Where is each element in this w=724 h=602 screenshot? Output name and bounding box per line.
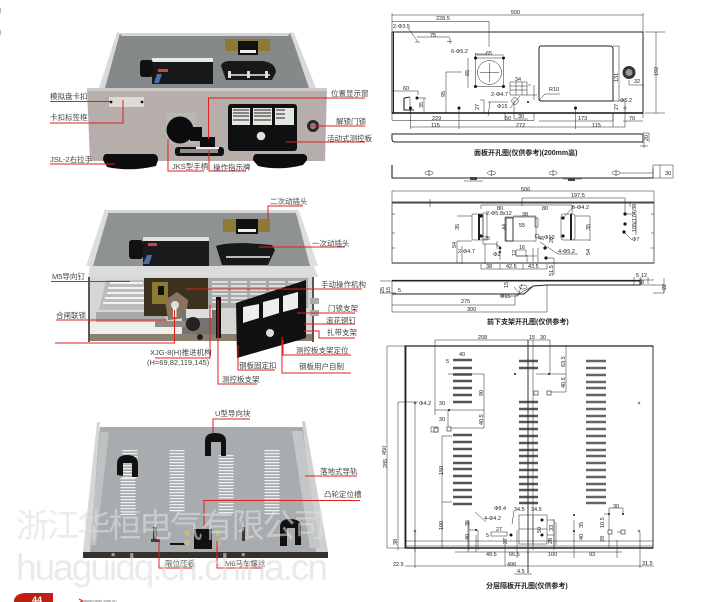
drawing: front lower bracket: 55 [519, 223, 525, 229]
drawing: partition plate: 27 [496, 527, 502, 533]
drawing: partition plate: 90 [479, 390, 485, 396]
drawing: partition plate: 50 [537, 527, 543, 533]
caption: partition plate: 分层隔板开孔图(仅供参考) [486, 581, 568, 590]
bracket [216, 297, 221, 338]
drawing: front lower bracket: 54 [586, 249, 592, 255]
drawing: front lower bracket: 35 [586, 224, 592, 230]
drawing: front lower bracket: 54 [452, 242, 458, 248]
bottom dims [392, 108, 643, 129]
callouts: open door view: 钢板固定扣 [239, 360, 276, 370]
drawing: front lower bracket: 80 [497, 206, 503, 212]
drawing: partition plate: 33 [549, 525, 555, 531]
drawing: partition plate: 31.5 [642, 561, 653, 567]
mechanism [144, 278, 216, 336]
drawing: front lower bracket: 2-Φ4.7 [458, 249, 475, 255]
callouts: open door view: 一次动插头 [312, 238, 350, 248]
drawing: panel cutout: R10 [549, 87, 559, 93]
drawing: panel cutout: 115 [592, 123, 601, 129]
drawing: front lower bracket: 4-Φ5.2 [558, 249, 575, 255]
drawing: front lower bracket: Φ15 [500, 294, 511, 300]
perforated plate [90, 278, 308, 336]
drawing: front lower bracket: 25 [380, 287, 386, 293]
drawing: front lower bracket: 38 [632, 204, 638, 210]
watermark: company name: 浙江华桓电气有限公司 [16, 507, 326, 544]
callouts: front view [50, 88, 372, 172]
callouts: front view: JKS型手柄 [172, 161, 209, 171]
cutout center [510, 82, 527, 95]
drawing: panel cutout: 70 [629, 116, 635, 122]
drawing: front lower bracket: 5 [636, 273, 639, 279]
drawing: front lower bracket: 105(174) [632, 210, 638, 232]
callouts: base plate: 限位压板 [165, 558, 195, 568]
drawing: front lower bracket: 275 [461, 299, 470, 305]
drawing: front lower bracket: 8 [641, 280, 644, 286]
drawing: panel cutout: 20 [644, 135, 650, 141]
drawing: front lower bracket: 80 [542, 206, 548, 212]
drawing: partition plate: 450 [382, 446, 388, 455]
drawing: panel cutout: 34 [515, 77, 521, 83]
drawing: panel cutout: 65 [465, 70, 471, 76]
drawing: front lower bracket: 35 [455, 224, 461, 230]
drawing: front lower bracket: Φ7 [632, 237, 639, 243]
side strip [392, 134, 643, 142]
center box [519, 515, 547, 544]
bottom rail [90, 334, 312, 341]
drawing: panel cutout: 27 [475, 104, 481, 110]
operating indicator [175, 147, 224, 156]
drawing: partition plate: 35 [579, 522, 585, 528]
panel: base plate photo [83, 421, 328, 558]
drawing: panel cutout: Φ5.2 [620, 98, 632, 104]
plate and rails [83, 421, 328, 558]
drawing: panel cutout: 32 [634, 79, 640, 85]
drawing: front lower bracket: 16 [519, 245, 525, 251]
control panel [228, 104, 297, 151]
drawing: front lower bracket: 20 [549, 237, 555, 243]
slot col 2 [519, 361, 538, 503]
front frame [88, 266, 318, 342]
callouts: base plate: 落地式导轨 [320, 466, 358, 476]
right holes [622, 212, 636, 240]
drawing: panel cutout: 2-Φ3.5 [393, 24, 410, 30]
callouts: open door view: 门锁支架 [328, 303, 358, 313]
drawing: panel cutout: 65 [486, 51, 492, 57]
callouts: open door view: M5导向钉 [52, 271, 85, 281]
callouts: open door view [51, 196, 366, 384]
black door [236, 280, 306, 358]
drawing: partition plate: 4-Φ4.2 [484, 516, 501, 522]
drawing: partition plate: 66.5 [509, 552, 520, 558]
drawing: panel cutout: 50 [505, 116, 511, 122]
callouts: open door view: 测控板支架定位 [296, 345, 349, 355]
breaker [140, 58, 213, 84]
drawing: front lower bracket: 300 [467, 307, 476, 313]
drawing: partition plate: 34.5 [514, 507, 525, 513]
drawing: partition plate: 35 [465, 520, 471, 526]
drawing: front lower bracket: 12 [641, 273, 647, 279]
drawing: panel cutout: 6-Φ5.2 [451, 49, 468, 55]
drawing: front lower bracket: 6-Φ4.2 [572, 205, 589, 211]
callouts: front view: 位置显示窗 [331, 88, 368, 98]
drawing: partition plate: 150 [439, 466, 445, 475]
round vents [622, 66, 636, 79]
callouts: front view: 模拟盘卡扣 [50, 91, 88, 101]
drawing: partition plate: 30 [613, 504, 619, 510]
center bracket [151, 527, 245, 549]
drawing: partition plate: 208 [478, 335, 487, 341]
caption: front lower bracket: 前下支架开孔图(仅供参考) [487, 317, 569, 326]
callouts: base plate: 凸轮定位槽 [324, 489, 362, 499]
drawing: panel cutout: Φ15 [497, 104, 508, 110]
unlock knob [307, 120, 319, 132]
side profile [392, 281, 640, 294]
drawing: partition plate: 27 [503, 538, 509, 544]
drawing: front lower bracket [380, 165, 673, 313]
callouts: base plate: U型导向块 [215, 408, 251, 418]
drawing: partition plate: 30 [439, 401, 445, 407]
drawing: panel cutout: 131 [614, 73, 620, 82]
drawing: front lower bracket: 15 [386, 287, 392, 293]
handles [103, 154, 307, 169]
drawing: partition plate: 5 [446, 359, 449, 365]
drawing: panel cutout: 2-Φ4.7 [491, 92, 508, 98]
drawing: partition plate: 40 [459, 352, 465, 358]
callouts: open door view: 钢板用户自制 [299, 361, 344, 371]
ventilation slots [128, 450, 272, 515]
drawing: partition plate: 93 [589, 552, 595, 558]
front panel [87, 88, 327, 161]
large window [539, 46, 613, 101]
drawing: partition plate: 28 [600, 536, 606, 542]
breaker [129, 237, 209, 270]
JKS handle [166, 113, 215, 149]
caption: panel cutout: 面板开孔图(仅供参考)(200mm高) [474, 148, 577, 157]
watermark: website: huaguidq.cn.china.cn [16, 547, 328, 588]
callouts: open door view: 合闸联锁 [56, 310, 86, 320]
drawing: front lower bracket: 38 [486, 264, 492, 270]
primary contact [221, 61, 276, 80]
drawing: panel cutout [392, 10, 665, 148]
drawing: front lower bracket: 42.5 [506, 264, 517, 270]
drawing: partition plate: 10.5 [600, 517, 606, 528]
drawing: front lower bracket: 44 [502, 224, 508, 230]
secondary plug [225, 39, 270, 55]
page number tab [14, 593, 53, 602]
U-shaped guides [117, 433, 301, 546]
callouts: open door view: 二次动插头 [270, 196, 308, 206]
callouts: base plate: M6马车螺丝 [225, 558, 266, 568]
callouts: open door view: XJG-8(H)推进机构 [150, 347, 212, 357]
drawing: partition plate: 22.5 [393, 562, 404, 568]
drawing: panel cutout: 500 [511, 10, 520, 16]
drawing: partition plate: 285 [383, 459, 389, 468]
drawing: partition plate: 5 [486, 533, 489, 539]
left holder [472, 213, 487, 240]
drawing: panel cutout: 27 [614, 104, 620, 110]
drawing: front lower bracket: 5 [398, 288, 401, 294]
drawing: front lower bracket: 12 [512, 250, 518, 256]
slot col 1 [453, 360, 472, 504]
drawing: partition plate: 63.5 [561, 356, 567, 367]
drawing: partition plate: 496 [507, 562, 516, 568]
drawing: panel cutout: 173 [578, 116, 587, 122]
drawing: front lower bracket: 46 [538, 236, 544, 242]
drawing: front lower bracket: 38 [522, 212, 528, 218]
panel: open door view photo [86, 209, 319, 358]
drawing: partition plate: 100 [548, 552, 557, 558]
drawing: partition plate: 100 [439, 521, 445, 530]
drawing: panel cutout: 30 [518, 114, 524, 120]
callouts: front view: JSL-2右拉手 [50, 154, 93, 164]
drawing: front lower bracket: 43.5 [528, 264, 539, 270]
drawing: panel cutout: 192 [654, 67, 660, 76]
drawing: partition plate: 34.5 [531, 507, 542, 513]
drawing: partition plate: 49.5 [486, 552, 497, 558]
primary contact [216, 243, 275, 265]
callouts: front view: 操作指示牌 [213, 162, 251, 172]
callouts: front view: 解锁门锁 [336, 116, 366, 126]
drawer interior [99, 32, 316, 88]
label plate [109, 97, 144, 107]
panel: front view photo of drawer [87, 32, 327, 169]
drawing: partition plate: 30 [439, 417, 445, 423]
drawing: partition plate: 40 [579, 534, 585, 540]
center [457, 216, 536, 241]
callouts: front view: 卡扣标签框 [50, 112, 88, 122]
callouts: open door view: 测控板支架 [222, 374, 260, 384]
drawing: panel cutout: 229 [432, 116, 441, 122]
drawing: partition plate: 15 [529, 335, 535, 341]
callouts: open door view: 滚花铜钉 [326, 315, 356, 325]
drawing: front lower bracket: 15 [504, 282, 510, 288]
drawer interior [86, 209, 318, 266]
drawing: partition plate: Φ4.2 [419, 401, 431, 407]
callouts: open door view: 扎带支架 [327, 327, 357, 337]
callouts: open door view: (H=69,82,119,145) [147, 358, 210, 367]
callouts: base plate [159, 408, 362, 568]
callouts: open door view: 手动操作机构 [321, 279, 366, 289]
drawing: front lower bracket: 197.5 [571, 193, 585, 199]
drawing: partition plate: 38 [393, 539, 399, 545]
drawing: partition plate: 40.5 [479, 414, 485, 425]
drawing: panel cutout: 75 [430, 33, 436, 39]
callouts: front view: 活动式测控板 [327, 133, 372, 143]
drawing: partition plate: 28 [548, 538, 554, 544]
drawing: partition plate [382, 335, 654, 575]
drawing: partition plate: 40 [465, 534, 471, 540]
drawing: front lower bracket: 25 [484, 236, 490, 242]
drawing: panel cutout: 272 [516, 123, 525, 129]
drawing: partition plate: 4.5 [517, 569, 525, 575]
drawing: front lower bracket: 30 [665, 171, 671, 177]
door latch [310, 298, 319, 316]
slot col 3 [586, 361, 606, 503]
secondary plug [223, 219, 270, 234]
drawing: partition plate: 40.5 [561, 377, 567, 388]
drawing: panel cutout: 115 [431, 123, 440, 129]
drawing: front lower bracket: 22 [662, 284, 668, 290]
drawing: front lower bracket: Φ10 [544, 235, 555, 241]
drawing: partition plate: 30 [540, 335, 546, 341]
drawing: front lower bracket: 506 [521, 187, 530, 193]
drawing: front lower bracket: 51.5 [549, 265, 555, 276]
drawing: front lower bracket: 2-Φ5.8x12 [486, 211, 512, 217]
drawing: panel cutout: 228.5 [436, 16, 450, 22]
drawing: front lower bracket: Φ2 [493, 252, 500, 258]
dimensions [387, 340, 654, 574]
drawing: panel cutout: 35 [419, 102, 425, 108]
right holder [561, 206, 590, 241]
drawing: panel cutout: 60 [403, 86, 409, 92]
drawing: partition plate: Φ8.4 [494, 506, 506, 512]
drawing: panel cutout: 95 [441, 91, 447, 97]
